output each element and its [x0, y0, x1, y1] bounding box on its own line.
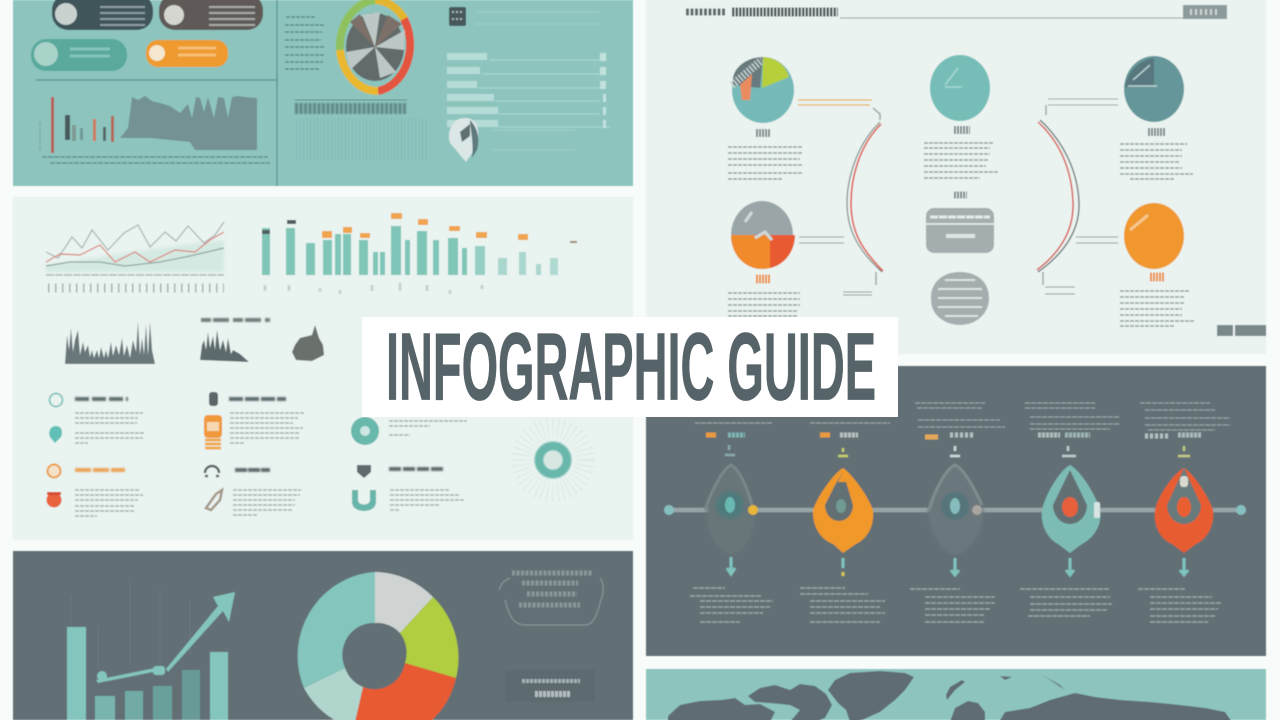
labels: step tags	[706, 435, 1202, 437]
donut chart	[298, 572, 458, 720]
feature: row two column one	[46, 464, 143, 516]
spike chart: small	[200, 330, 249, 362]
captions and text: left column	[728, 133, 802, 316]
timeline bar	[668, 508, 1240, 512]
text block: small note	[505, 670, 595, 702]
title banner	[362, 314, 898, 420]
icon: square badge	[449, 7, 466, 26]
pill: orange	[146, 40, 228, 67]
caption lines	[42, 157, 270, 163]
radial gauge	[521, 428, 585, 492]
arrow: rising trend	[96, 592, 235, 683]
drop: step one grey	[705, 465, 758, 555]
feature: row two column two	[205, 466, 301, 515]
text blocks: top captions	[695, 403, 1230, 430]
drop: step five red	[1155, 468, 1213, 553]
feature: row one column two	[204, 392, 305, 448]
bar chart: teal bars with orange caps	[262, 213, 577, 294]
captions and text: right column	[1120, 132, 1195, 326]
small heading	[201, 318, 270, 322]
panel: light circle diagram	[646, 0, 1266, 354]
circle: grey over orange	[731, 201, 795, 269]
bar chart: small multi-colour bars	[40, 97, 114, 153]
drop: step two orange	[813, 468, 873, 553]
feature: row one column three	[351, 417, 467, 445]
text blocks: bottom captions	[690, 588, 1222, 622]
circle: orange	[1124, 203, 1184, 269]
drop: step three grey	[928, 465, 983, 555]
icon: map blob	[292, 325, 324, 361]
panel: dark chart and donut	[13, 551, 633, 720]
card: grey rounded rectangle	[926, 208, 994, 253]
pill: brown	[159, 0, 263, 30]
feature: row one column one	[49, 394, 145, 443]
card: grey oval	[931, 272, 989, 325]
chart: fine vertical lines	[296, 118, 427, 160]
drop: step four teal	[1042, 465, 1100, 553]
circle: dark teal	[1124, 56, 1184, 122]
icon: location pin	[449, 118, 478, 162]
panel: teal world map	[646, 669, 1266, 720]
list: pale stat bars	[447, 12, 610, 128]
circle: multi-colour pie	[732, 57, 794, 123]
spike chart	[65, 322, 155, 364]
marker: start and end nodes	[664, 505, 1246, 515]
bar chart: growth bars	[67, 627, 228, 720]
area chart: grey silhouette	[120, 96, 257, 150]
captions and text: centre column	[924, 130, 998, 195]
badge: shield text	[499, 573, 603, 625]
pill: dark slate	[52, 0, 153, 30]
text block: ring note	[285, 17, 325, 69]
connector: left arc	[798, 100, 883, 295]
panel: dark timeline	[646, 366, 1266, 656]
feature: row two column three	[352, 465, 465, 511]
connector: right arc	[1037, 99, 1118, 294]
donut ring with grey wheel	[340, 0, 410, 91]
header text and rule	[686, 5, 1227, 19]
heading: wave text band	[295, 100, 407, 108]
icons: small glyphs above drops	[725, 445, 1190, 456]
icons: small teal glyphs below drops	[727, 557, 1188, 576]
legend boxes	[1217, 325, 1266, 336]
line chart	[46, 222, 224, 288]
panel: top-left teal dashboard	[13, 0, 633, 186]
panel: light charts and icons	[13, 197, 633, 540]
pill: teal	[31, 39, 127, 71]
map: landmasses	[668, 671, 1232, 720]
circle: teal	[930, 55, 990, 121]
